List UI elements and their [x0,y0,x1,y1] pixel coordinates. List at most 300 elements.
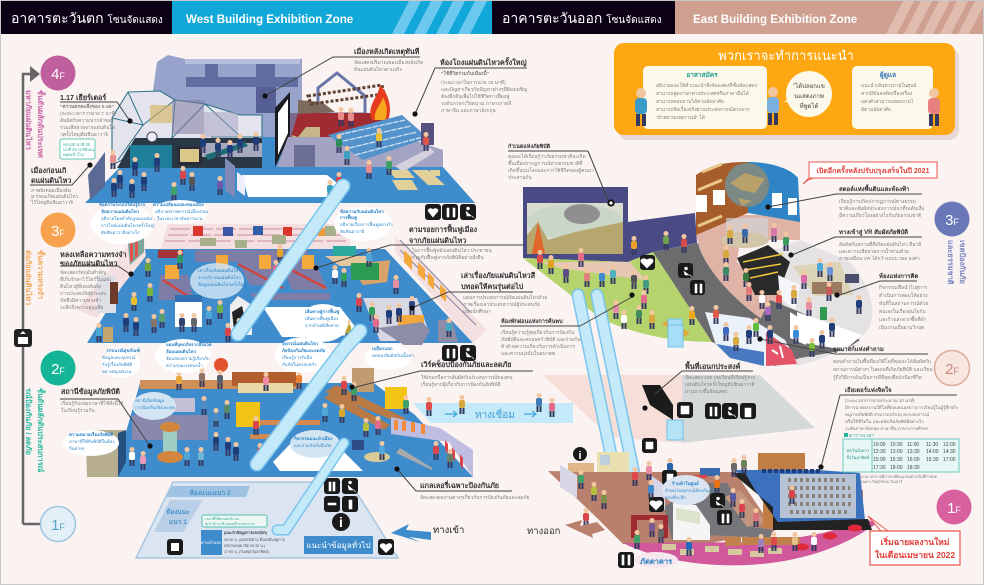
label: 1.17 theatre: "ความตกตะลึงของ 5:46" [60,103,114,110]
1F icons: i [578,450,582,462]
2F info bubbles: จัดแสดงความรู้เกี่ยวกับ [166,355,210,362]
timetable: 18:30 [907,465,920,471]
label: great quake hall: ระดับภาษาเวียดนาม ภาษาเกาหลี [441,100,511,107]
orange guide panel [614,43,959,140]
label: great quake hall: ต้องฝึกฝันเพื่อไปใช้ชีวิตกาเฟื่องฟู [441,93,510,100]
floor badge: 4F: มหาภัยแผ่นดินไหว [24,90,33,150]
connecting corridor: ทางเชื่อม [475,407,515,421]
floor badge: 4F [24,56,76,158]
label: theatre schedule [818,386,958,470]
label: disaster safety workshop: ค้าด้วยความเกี่ยวกับการดำเนินการ [501,343,575,350]
4F visitors [110,107,429,201]
1F icons: ภัตตาคาร [640,557,673,566]
label: city after the quake: เมืองหลังเกิดเหตุทันที [354,47,420,56]
label: passing stories to next generation: แผนการประสบการณ์ภัยแผ่นดินไหวด้วย [463,294,547,301]
3F white opening [263,307,360,337]
3F info bubbles: การไหลแผ่นดินไหวครั้งใหญ่ [101,222,155,228]
label: disaster safety workshop: และความมุ่งมั่นในอนาคต [501,350,555,357]
west 1F plan: เวลาที่ใช้ตลอดบริเวณ [205,516,240,521]
timetable: ถึงวันอาทิตย์ [846,455,870,460]
callout: new screening: ในเดือนเมษายน 2022 [875,550,955,560]
2F white opening [273,442,363,471]
west escalator 3F to 4F [238,186,343,334]
label: passing stories to next generation: แบบนักศึกษา [463,308,491,315]
timetable: 18:00 [890,465,903,471]
label: city after the quake: ทันแผ่นดินไหวตามจริง [354,66,403,73]
callout: reopening: เปิดอีกครั้งหลังปรับปรุงเสร็จในปี 2021 [817,164,930,175]
4F city block building [153,55,302,137]
label: earth and sky theatre: มีความเกี่ยวโยงอย่างไรกับภัยธรรมชาติ [839,212,921,219]
timetable: 10:30 [890,442,903,448]
orange guide panel: "ฝ่ายผ่านเหตุการณ์" ได้ [656,114,705,121]
attendant box [852,66,933,129]
west 2F floor scene [63,337,473,477]
timetable: บางเวลาอาจมีการเปลี่ยนแปลงตามวันที่กำหนด [861,474,938,479]
floor badge: 2F: 2F [51,361,65,378]
timetable: ตารางเวลา [849,433,874,439]
callout: new screening: เริ่มฉายผลงานใหม่ [881,535,949,547]
exit arrow [527,520,605,538]
label: recovery trail [313,223,533,271]
label: question studio: ลูกบาสก์แห่งคำถาม [833,345,884,354]
white counters [778,275,800,310]
2F info bubbles: ภาษาที่ใช้กับพิบัติในท้อง [69,438,115,444]
label: shared room: เนินงานเมื่อยามวิกฤต [879,324,924,331]
grey floor [664,483,773,540]
label: disaster safety workshop: ภัยพิบัติและครอบครัวพิบัติ และร่วมกัน [501,337,581,343]
orange guide panel: ด้ตามอัธยาศัย [861,106,891,113]
label: before the earthquake [30,162,93,206]
east escalators 1F to 3F [578,295,642,513]
3F info bubbles: ข้อมูลแผ่นดินไหวครั้งใหญ่ [198,281,248,288]
label: disaster zones: ประสานกัน [508,175,532,181]
theatre seats [735,470,865,525]
floor badge: 1F [40,506,76,542]
floor badge: east 1F [936,490,972,524]
orange guide panel: สามารถพูดภาษาต่างประเทศหรือภาษามือได้ [656,90,749,97]
guide figures [635,87,940,126]
west 1F plan: ทางเข้าออก [201,540,222,545]
label: earth and sky theatre [765,183,924,219]
label: disaster information station: เรียนรู้กับเหตุภาษาที่ใช้สิ่งนี้ได้ [61,398,124,407]
label: memories of the quake: ที่เก็บรักษาไว้ไหว้ในแผ่น [60,275,112,283]
west 1F plan: แนว 1 [169,519,187,526]
floor badge: 2F [24,350,76,473]
label: great quake hall: ภาษาจีน และภาษาอังกฤษ [441,107,496,114]
floor badge: east 3F: 3F [945,212,959,229]
2F info bubbles [63,337,415,458]
timetable: 13:00 [890,449,903,455]
label: city after the quake [262,47,423,99]
4F screen [275,92,290,167]
2F info bubbles: ทดลองสัมผัสกับเนื้อหา [372,352,415,358]
3F info bubbles: ฮันชินอาวาจิ [340,229,365,234]
label: disaster prevention workshop: เวิร์คช็อปป้องกันภัยและลดภัย [421,359,511,369]
timetable: 10:00 [873,442,886,448]
lilac panel [560,465,577,498]
3F info bubbles: ความเปลี่ยนแปลงของเมือง [153,201,204,207]
label: 1.17 theatre: รวมเสียหายจากแผ่นดินไห [60,124,115,131]
floor badge: east 3F: เขตป้องกันภัย [958,240,967,284]
label: disaster zones: คุณจะได้เรียนรู้ว่าภัยธรรมชาติจะเกิด [508,153,586,160]
callout: reopening [803,162,937,184]
2F info bubbles: และร่วมกันรับมือภัย [294,442,332,448]
label: great quake hall: และปัญหาเกี่ยวกับปัญหาต่างๆที่ต้องเผชิญ [441,86,527,93]
2F info bubbles: เรียนรู้การรับมือ [282,354,312,361]
west 1F plan: ห้องแนะแนว 2 [189,488,231,497]
timetable: 12:00 [943,442,956,448]
2F info bubbles: ความรุนแรงของน้ำ [166,362,203,369]
label: before the earthquake: เมืองก่อนเกิ [31,166,66,175]
orange guide panel: แต่งตัวสามารถสอบถามไ [861,98,914,105]
header: west building [1,1,492,34]
label: disaster safety workshop: ห้องพักผ่อนแห่งการค้นพบ [501,317,563,325]
timetable: 12:30 [873,449,886,455]
label: before the earthquake: ไว้ใหญ่ฮันชินอาวาจิ [30,199,73,206]
cafe counter [725,537,741,546]
label: VR entrance: ภาพเสมือน VR ได้กว้างแบบ 360 องศา [839,255,920,262]
label: 1.17 theatre: 1.17 เธียร์เตอร์ [60,93,106,102]
green floor [523,252,712,342]
2F info bubbles: สถานีเปิดข้อมูล [135,398,164,404]
2F info bubbles: กับภัยในครอบครัว [282,362,317,367]
1F info bubble: ของที่ระลึก [665,494,686,500]
label: disaster safety workshop: เรียนรู้ความรู้สุดเกี่ยวกับการป้องกัน [501,329,575,336]
stepped seating [737,245,790,295]
east 3F visitors [537,223,862,357]
pink cafeteria arc [623,520,877,565]
4F white opening [242,175,350,197]
label: question studio: รู้ถึงวิธีการอันเป็นการดีที่สุดเพื่อปกป้องชีวิต [833,373,922,381]
label: disaster information station: สถานีข้อมูลภัยพิบัติ [61,387,120,397]
4F beds [388,170,445,190]
callout: new screening [868,516,960,565]
header: west building: West Building Exhibition Zone [186,13,354,26]
west 1F plan: ทุกๆ 30 นาที ตลอดที่ บรรยากาศ [205,521,255,527]
label: passing stories to next generation: ภาพเรื่องเล่าประสบการณ์ผู้ประสบภัย [463,301,540,308]
label: disaster prevention workshop: ใช้เกมหรือการสัมผัสกับประสบการณ์ของคน [421,374,513,381]
west 3F floor scene [77,200,487,345]
label: theatre schedule: (ระยะเวลาการฉายประมาณ 10 นาที) [845,398,915,403]
label: disaster prevention workshop: เรียนรู้จากผู้เกี่ยวกับการป้องกันภัยพิบัติ [421,381,501,388]
label: prevention gallery: จัดแสดงผลงานต่างๆเกี่ยวกับการป้องกันภัยและลดภัย [420,494,530,501]
header: west building: อาคารตะวันตก โซนจัดแสดง [11,10,163,26]
2F info bubbles: อย่างสนุกสนาน [102,369,131,375]
label: recovery trail: ร่วมกันฟื้นฟูจากภัยพิบัติอย่างยั่งยืน [412,252,484,261]
floor badge: 4F: ชั้นดันผลักดันประเทศ [36,90,47,158]
4F video panels [88,152,105,200]
label: VR entrance: ทางเข้าสู่ VR สัมผัสภัยพิบัติ [839,228,908,237]
teal notice [202,515,267,527]
3F info bubbles: เส้นทางฟื้นฟูเมือง [305,315,338,322]
3F info bubbles: จากบ้านที่เสียหาย [305,322,339,328]
header: east building: East Building Exhibition Zone [693,13,858,26]
west escalator 2F to 3F [257,331,360,464]
2F exhibits [140,380,300,389]
orange guide panel: แนะนำเส้นทางภายในศูนย์ [861,82,917,89]
room 1 [154,500,203,532]
navy hall [523,187,697,262]
4F dome theatre [112,91,262,165]
1F info bubble [662,475,715,505]
label: disaster zones: ขึ้นเมื่อปรากฏการณ์ทางธรรมชาติที่ [508,158,582,167]
floor badge: east 2F [934,350,970,386]
2F info bubbles: วรรณรณีสุขภัณฑ์ [106,347,140,354]
timetable: เฉพาะวันศุกร์และวันเสาร์ [861,479,902,485]
icons: 3F facilities [425,204,476,220]
label: prevention gallery [394,466,530,501]
label: shared room: ดำเนินการตอบโต้อย่าง [879,292,928,299]
label: disaster zones: เกิดขึ้นบนโลกและการใช้ชีวิตของผู้คนมา [508,165,594,174]
3F info bubbles: ข้อความแผ่นดินไหว [101,208,140,214]
glass cube [668,319,683,347]
2F info bubbles: ถิ่นต่างๆ [69,445,85,451]
label: 1.17 theatre: วครั้งใหญ่ฮันชินอาวาจิ [60,129,108,138]
tables [795,524,862,550]
label: 1.17 theatre: (ระยะเวลาการฉาย 7 นาที) [60,110,117,117]
label: 1.17 theatre: สัมผัสกับความน่ากลัวของ [60,118,114,124]
3F info bubbles [91,200,394,342]
floor badge: east 3F [934,202,970,285]
label: memories of the quake: ดินไหวผู้ที่เคยสัมผัส [60,283,101,290]
label: shared room [834,272,928,331]
orange guide panel: อาสาสมัคร [686,71,718,79]
theatre doors [758,453,805,472]
label: memories of the quake: ระลึกถึงความสูญเสีย [60,304,103,311]
3F info bubbles: อธิบายโดยย่ำต้นรูปแบบต่อ [101,215,152,222]
floor badge: 3F: ต่อภัยแผ่นดินไหว [24,250,33,305]
label: multipurpose space: จัดแสดง 100 บทเรียนที่เรียนรู้จาก [685,374,755,381]
4F dark stage [117,138,262,168]
2F info bubbles: แผนที่อุทกภัยจากสิ่งแวด [166,341,212,348]
timetable: 16:00 [907,457,920,463]
label: shared room: ห้องแห่งการคิด [879,272,918,280]
header: east building: อาคารตะวันออก โซนจัดแสดง [502,10,662,26]
label: theatre schedule: มีการฉายผลงานวิดีโอที่ตอบสนองข่าวการเรียนรู้ในผู้รู้สึกจริง [845,404,958,411]
floor badge: 3F [24,212,76,305]
label: VR entrance: สัมผัสกับสถานที่ที่เกิดแผ่นดินไหว สึนามิ [839,241,921,248]
label: before the earthquake: ดแผ่นดินไหว [31,176,71,185]
connecting corridor [413,393,573,423]
3F info bubbles: ข้อความระบบเรียนรู้จาก [99,201,146,208]
volunteer box [643,66,767,129]
orange guide panel: ที่พูดได้ [800,102,818,110]
entrance arrow [391,524,464,542]
facility icons [324,478,340,494]
label: disaster prevention workshop [349,359,533,390]
label: memories of the quake: จัดแสดงวัตถุอันสำคัญ [60,270,106,276]
general info [304,536,373,554]
2F info bubbles: กิจกรรมแนะนำเมือง [294,435,332,441]
timetable: 15:30 [890,457,903,463]
floor badge: 1F: 1F [51,517,65,534]
label: passing stories to next generation: บทอดให้คนรุ่นต่อไป [461,282,524,291]
3F blue floor [87,249,473,343]
label: memories of the quake [60,250,134,311]
label: theatre schedule: หมู่ภายภัยพิบัติ สามารถปรับปรุงประสบการณ์ [845,412,929,418]
orange guide panel: พวกเราจะทำการแนะนำ [718,48,854,63]
label: VR entrance: และความเสียหายจากน้ำท่วมด้วย [839,246,909,255]
label: great quake hall: (ระยะเวลาในการฉาย 15 นาที) [441,79,506,86]
label: shared room: ตนเองในเรื่องอุ่นใจกับ [879,308,925,315]
audience [788,480,852,512]
floor badge: 2F: ชั้นดันผลักดันประสบการณ์ [36,388,47,473]
east 1F floor scene [548,438,877,568]
west 1F plan: (แนะนำข้อมูลการแจกบัตร) [224,530,268,536]
timetable [843,433,959,485]
3F info bubbles: การฟื้นฟู [340,213,357,221]
2F info bubbles: อุปกรณ์แผ่นดินไหว [282,340,319,347]
timetable: 13:30 [907,449,920,455]
west 1F plan: หลังวันหยุด เปิด 09:30 น.) [224,543,265,549]
label: question studio: ตอบคำถามในพื้นที่แนวิดีโอที่คุณจะได้สัมผัสกับ [833,356,931,365]
3F info bubbles: เล่าเรื่องภัยแผ่นดินไหว [198,267,241,273]
4F auditorium [277,137,443,167]
floor badge: 3F: 3F [51,223,65,240]
label: 1.17 theatre: นาที 40 นาทีตอน [63,147,94,152]
label: multipurpose space: พื้นที่เอนกประสงค์ [685,360,741,371]
floor badge: 3F: ชั้นความทรงจำ [36,250,47,299]
label: 1.17 theatre: ทุกๆ30 นาที 30 [63,142,91,148]
floor badge: east 1F: 1F [947,500,961,517]
floor badge: east 3F: และธรรมชาติ [946,240,955,285]
label: memories of the quake: การประสบภัยผู้ประสบ [60,290,106,297]
label: earth and sky theatre: สตอล์แห่งพื้นดินและท้องฟ้า [839,183,910,193]
orange guide panel: สามารถฟังเรื่องจริงผ่านประสบการณ์ตรงจาก [656,106,750,113]
1F info bubble: จำหน่ายอุปกรณ์ป้องกันภัย [665,488,715,494]
grey walkway [653,243,800,366]
drum wall [696,162,748,235]
timetable: 11:30 [926,442,938,448]
label: shared room: กิจกรรมเพื่อนำไปสู่การ [879,284,927,291]
2F info bubbles: การป้องกันภัยและลด [135,405,175,410]
label: VR entrance [788,228,922,262]
label: great quake hall: "ใช้ชีวิตร่วมกันเมืองนี้" [441,68,489,77]
3F info bubbles: ในระยะเวลาอันยาวนาน [157,216,203,221]
3F right wall [395,236,487,343]
orange guide panel: ผู้ดูแล [880,70,896,80]
orange guide panel: นแสดงภาพ [794,93,824,100]
timetable: 11:00 [907,442,919,448]
orange guide panel: หากมีข้อสงสัยหรือเครื่อง [861,90,913,97]
3F info bubbles: เส้นทางสู่การฟื้นฟู [305,307,339,315]
label: great quake hall [412,56,527,117]
orange guide panel: "ได้ปลอกแข [793,82,825,90]
header: east building [492,1,984,34]
speech bubble [786,71,832,117]
2F info bubbles: ล้อมแผ่นดินไหว [166,348,197,354]
label: disaster safety workshop [500,292,635,357]
escalator 1F to 2F [277,443,344,530]
2F info bubbles: ภัยป้องกันภัยและลดภัย [282,347,325,353]
2F info bubbles: ข้อมูลและอุปกรณ์ [102,355,136,361]
3F visitors [96,244,452,342]
label: recovery trail: ตามรอยการฟื้นฟูเมือง [409,223,478,235]
1F icons [573,438,732,568]
west 1F plan: แนะนำข้อมูลทั่วไป [306,539,371,551]
shop [673,503,710,540]
room 2 [166,486,250,497]
brown lobby [548,471,775,545]
elevator icon [167,539,183,555]
east 2F floor [543,375,815,443]
label: theatre schedule: หรือใช้ชีวิตใน และหลังเกิดภัยพิบัติอย่างไร [845,418,924,424]
label: great quake hall: ห้องโถงแผ่นดินไหวครั้งใหญ่ [440,56,527,67]
label: shared room: ทันทีในสถานการณ์ด้วย [879,300,928,307]
3F info bubbles: ข้อความกับแผ่นดินไหว [340,208,384,214]
west 1F plan: i [339,514,343,530]
question studio [705,312,797,366]
label: theatre schedule: เธียเตอร์แห่งจิตใจ [845,386,892,394]
label: multipurpose space [642,360,755,411]
entrance arrow: ทางเข้า [433,525,464,536]
3F info bubbles: ฮันชินอาวาจิอย่างไร [101,230,140,235]
label: recovery trail: จากภัยแผ่นดินไหว [409,236,466,245]
label: memories of the quake: ภัยซึ่งมีความทรงจำ [60,297,101,304]
2F info bubbles: เปลือกนอก [372,345,393,351]
label: question studio [757,336,933,381]
timetable: 16:30 [926,457,939,463]
timetable: 15:00 [873,457,886,463]
label: theatre schedule: ระดับภาษาอังกฤษ ภาษาจีน ภาษาเกาหลีฯลฯ [845,426,929,431]
label: memories of the quake: ของภัยแผ่นดินไหว [60,259,117,268]
label: disaster information station: ในเรียนรู้ร่วมกัน [61,407,95,414]
floor badge: east 2F: 2F [945,361,959,378]
3F left wall [77,228,146,318]
label: 1.17 theatre [60,93,133,159]
west 1F plan: 09:30 น. (แต่ปกติตาม ตั้งแต่ต้นฤดูกาล [224,537,285,542]
label: 1.17 theatre: หยุดเข้าโรง [63,152,84,158]
west 4F floor scene [85,55,475,203]
east 3F floor scene [523,162,872,366]
timetable: 17:30 [873,465,886,471]
orange guide panel: สามารถตอบถามได้ตามอัธยาศัย [656,98,724,105]
label: before the earthquake: ภาพยังค่อยเมืองอัน [31,187,72,194]
3F info bubbles: อธิบายสภาพการณ์เมืองก่อน [155,208,208,214]
1F visitors [578,455,817,556]
label: prevention gallery: แกลเลอรี่เฉพาะป้องกันภัย [420,480,499,490]
west 1F plan: ห้องแนะ [166,507,190,516]
label: earth and sky theatre: เรียนรู้การเกิดปรากฏการณ์ทางธรรม [839,198,916,205]
west 1F plan [136,443,398,558]
floor badge: 4F: 4F [51,66,65,83]
label: passing stories to next generation [409,270,547,315]
label: memories of the quake: หลงเหลือความทรงจำ [60,250,127,259]
4F blue floor [85,135,475,203]
label: passing stories to next generation: เล่าเรื่องภัยแผ่นดินไหวสี [461,270,536,280]
1F info bubble: ร้านค้าในศูนย์ [672,480,699,487]
3F back wall [160,224,350,250]
floor badge: 2F: รณ์ป้องกันภัย / ลดภัย [24,388,33,455]
2F info bubbles: ความหมายเรื่องภัยพิบัติ [69,431,113,437]
route line with floor arrows [14,66,41,524]
label: before the earthquake: มาก่อนเกิดแผ่นดินไหว [31,193,79,200]
label: disaster zones: กำเนดแห่งภัยพิบัติ [508,143,551,150]
pink round floor [696,215,800,342]
timetable: ทุกวันอังคาร [847,448,870,454]
label: multipurpose space: ผ่านมากขึ้นจัดแสดง [685,386,728,395]
label: disaster zones [508,143,614,206]
entry awning [631,515,668,538]
label: disaster information station [60,387,153,449]
west 1F plan: 17:00 น. (วันหยุดวันอาทิตย์) [224,550,269,555]
2F info bubbles: รับรู้เรื่องภัยพิบัติ [102,361,132,368]
2F visitors [129,368,453,470]
label: city after the quake: จัดแสดงปริมาณของเมืองหลังเกิด [354,59,423,66]
orange guide panel: อธิบายและให้คำแนะนำสิ่งจัดแสดงที่ชั้นจัดแสดง [656,80,758,89]
4F rubble set [318,73,365,114]
icons: 2F facilities [442,345,476,361]
